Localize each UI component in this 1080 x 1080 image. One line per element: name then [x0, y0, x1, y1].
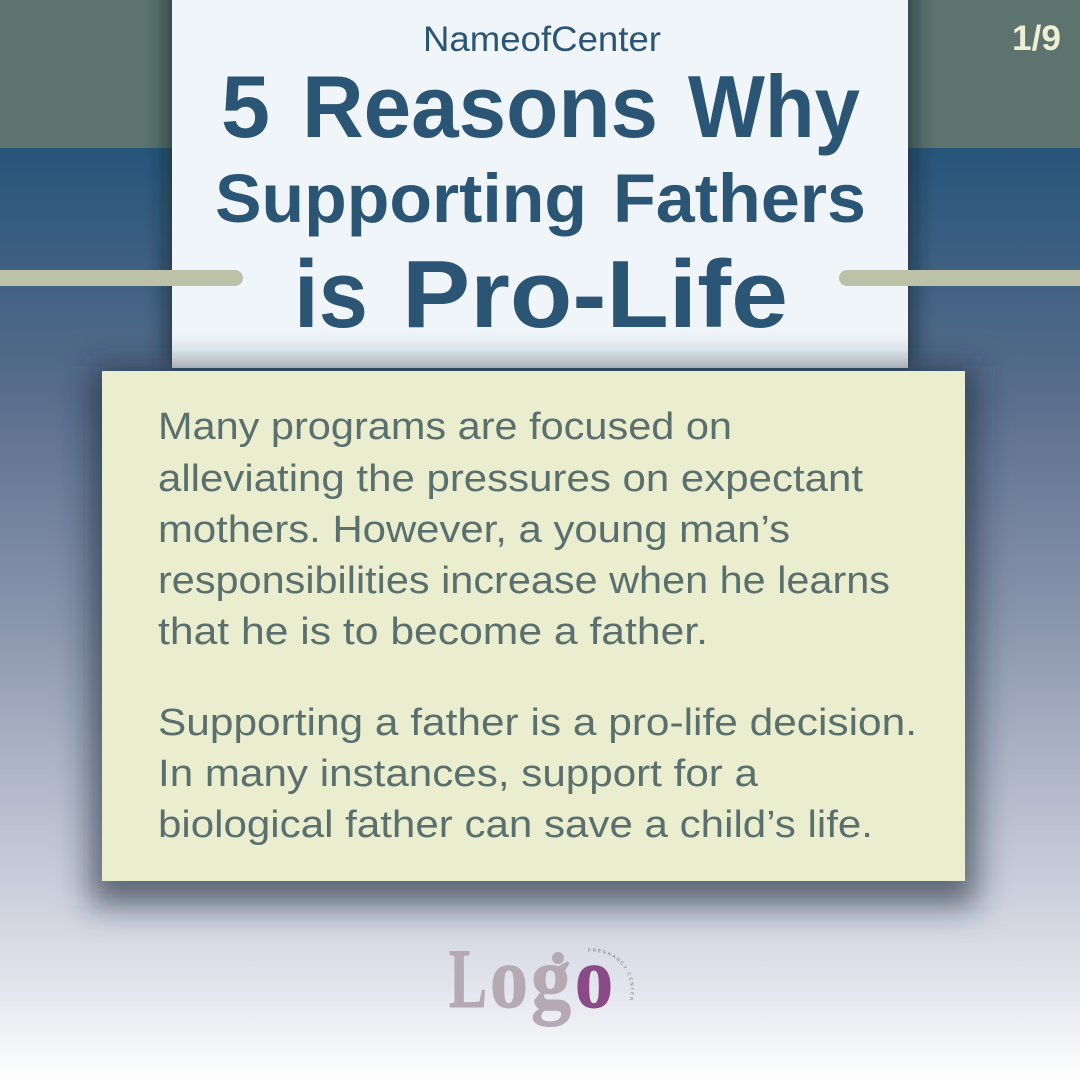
- header panel shadow: [164, 0, 916, 368]
- logo: o: [575, 930, 613, 1027]
- right accent bar: [839, 270, 1080, 286]
- logo: g: [531, 930, 571, 1027]
- top band: [0, 0, 1080, 148]
- title: Why: [688, 57, 860, 156]
- center name: NameofCenter: [423, 20, 661, 59]
- logo: [449, 930, 634, 1027]
- left accent bar: [0, 270, 243, 286]
- body text: biological father can save a child’s life.: [158, 804, 873, 846]
- title: 5: [221, 57, 270, 156]
- body text: that he is to become a father.: [158, 611, 708, 653]
- body text: mothers. However, a young man’s: [158, 509, 790, 551]
- body text: responsibilities increase when he learns: [158, 560, 890, 602]
- logo: o: [490, 930, 528, 1027]
- body text: [158, 406, 917, 846]
- body text: Many programs are focused on: [158, 406, 732, 448]
- page number: 1/9: [1012, 19, 1061, 58]
- header panel: [172, 0, 908, 368]
- title: Pro-Life: [402, 241, 788, 348]
- text card shadow: [90, 366, 977, 906]
- logo: PREGNANCY CENTER: [588, 948, 634, 1000]
- body text: alleviating the pressures on expectant: [158, 458, 863, 500]
- body text: Supporting a father is a pro-life decision.: [158, 702, 917, 744]
- text card: [102, 371, 965, 881]
- title: Fathers: [613, 160, 866, 237]
- title: Supporting: [215, 160, 587, 237]
- logo: L: [449, 932, 487, 1026]
- title: Reasons: [302, 57, 658, 156]
- title: is: [294, 241, 368, 348]
- title: [215, 57, 866, 348]
- body text: In many instances, support for a: [158, 753, 759, 795]
